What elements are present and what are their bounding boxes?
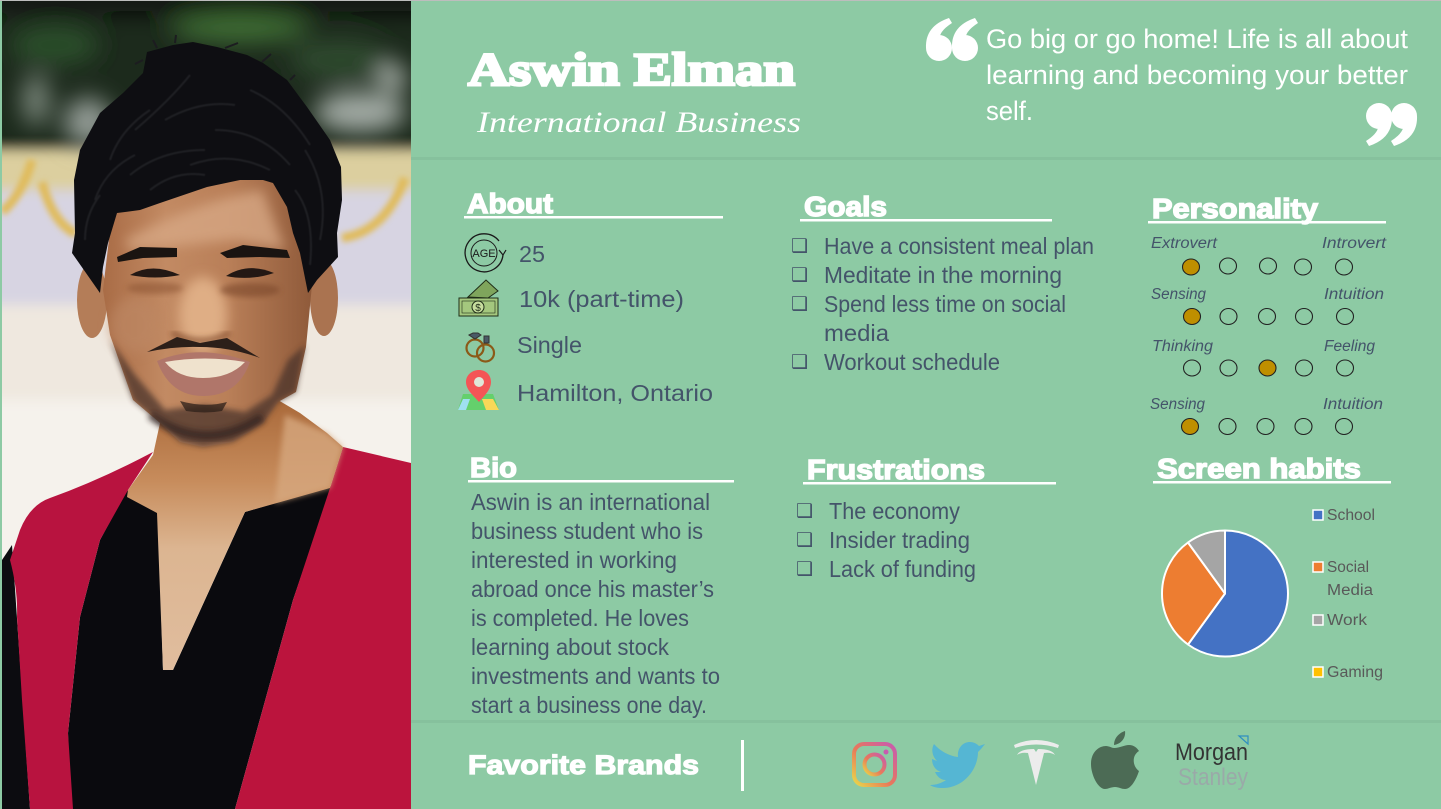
bio text: [471, 489, 720, 718]
face: [103, 170, 312, 447]
title: Aswin Elman: [468, 44, 795, 96]
frustrations list: ❑: [796, 500, 813, 522]
goals list: media: [824, 320, 889, 346]
quote text: learning and becoming your better: [986, 60, 1408, 90]
frustrations list: Lack of funding: [829, 556, 976, 582]
scale: thinking feeling: Thinking: [1152, 338, 1213, 355]
portrait photo: [0, 0, 450, 809]
frustrations list: [796, 498, 976, 582]
icon: age: AGE: [472, 248, 496, 260]
scale: thinking feeling: Feeling: [1324, 338, 1375, 355]
legend: Work: [1327, 612, 1367, 629]
screen habits heading: Screen habits: [1157, 453, 1361, 484]
bio text: Aswin is an international: [471, 489, 710, 515]
frustrations heading: Frustrations: [807, 454, 985, 485]
panel: screen habits: [1153, 453, 1391, 681]
scale: extrovert introvert: [1151, 235, 1387, 275]
scale: sensing intuition: Sensing: [1151, 286, 1206, 303]
income value: 10k (part-time): [519, 286, 684, 312]
panel: goals: [791, 191, 1094, 375]
bio text: business student who is: [471, 518, 703, 544]
quote text: Go big or go home! Life is all about: [986, 24, 1408, 54]
icon: tesla: [1014, 740, 1059, 785]
legend: Gaming: [1327, 664, 1383, 681]
legend: School: [1327, 507, 1375, 524]
quote text: self.: [986, 96, 1033, 126]
marital status: Single: [517, 332, 582, 358]
frustrations list: ❑: [796, 529, 813, 551]
scale: sensing intuition second: Intuition: [1323, 396, 1383, 413]
goals list: ❑: [791, 351, 808, 373]
goals list: [791, 233, 1094, 375]
eyes: [130, 268, 180, 278]
icon: instagram: [854, 744, 895, 785]
bio text: interested in working: [471, 547, 677, 573]
scale: sensing intuition second: [1150, 396, 1383, 434]
icon: twitter: [930, 742, 985, 788]
pie chart: [1162, 530, 1288, 656]
goals list: Spend less time on social: [824, 291, 1066, 317]
bio heading: Bio: [470, 452, 517, 483]
goals heading: Goals: [804, 191, 887, 222]
goals list: ❑: [791, 293, 808, 315]
beard: [110, 340, 305, 447]
icon: opening quote: [926, 18, 978, 61]
panel: bio: [468, 452, 734, 718]
panel: favorite brands: [468, 731, 1248, 791]
goals list: Have a consistent meal plan: [824, 233, 1094, 259]
scale: thinking feeling: [1152, 338, 1375, 376]
logo: morgan stanley: [1175, 736, 1248, 791]
bio text: learning about stock: [471, 634, 669, 660]
panel: frustrations: [796, 454, 1056, 582]
scale: extrovert introvert: Extrovert: [1151, 235, 1218, 252]
icon: rings: [466, 333, 494, 362]
ears: [77, 269, 106, 338]
hair: [72, 42, 342, 293]
about heading: About: [467, 188, 553, 219]
scale: extrovert introvert: Introvert: [1322, 235, 1387, 252]
frustrations list: ❑: [796, 558, 813, 580]
brands heading: Favorite Brands: [468, 750, 699, 780]
legend: Social: [1327, 559, 1369, 576]
bio text: start a business one day.: [471, 692, 707, 718]
icon: money: $: [475, 303, 481, 314]
personality heading: Personality: [1152, 193, 1318, 224]
location: Hamilton, Ontario: [517, 380, 713, 406]
panel: about: [458, 188, 723, 410]
goals list: ❑: [791, 235, 808, 257]
legend: [1313, 507, 1383, 681]
age value: 25: [519, 241, 545, 267]
logo: morgan stanley: Stanley: [1178, 764, 1248, 791]
goals list: Workout schedule: [824, 349, 1000, 375]
subtitle: International Business: [476, 106, 801, 139]
goals list: ❑: [791, 264, 808, 286]
bio text: is completed. He loves: [471, 605, 689, 631]
scale: sensing intuition second: Sensing: [1150, 396, 1205, 413]
nose: [172, 333, 230, 340]
legend: Media: [1327, 582, 1373, 599]
icon: map pin: [458, 370, 499, 410]
clothing: [2, 545, 30, 809]
scale: sensing intuition: Intuition: [1324, 286, 1384, 303]
icon: age: [465, 234, 506, 272]
mustache: [147, 337, 260, 358]
panel: personality: [1148, 193, 1387, 434]
icon: apple: [1091, 731, 1139, 789]
neck: [127, 400, 343, 670]
frustrations list: The economy: [829, 498, 960, 524]
quote text: [986, 24, 1408, 126]
goals list: Meditate in the morning: [824, 262, 1062, 288]
scale: sensing intuition: [1151, 286, 1384, 324]
eyebrows: [117, 247, 177, 262]
bio text: abroad once his master’s: [471, 576, 714, 602]
mouth: [157, 352, 250, 396]
bio text: investments and wants to: [471, 663, 720, 689]
icon: closing quote: [1366, 103, 1417, 146]
logo: morgan stanley: Morgan: [1175, 739, 1248, 766]
frustrations list: Insider trading: [829, 527, 970, 553]
icon: money: [459, 280, 498, 316]
